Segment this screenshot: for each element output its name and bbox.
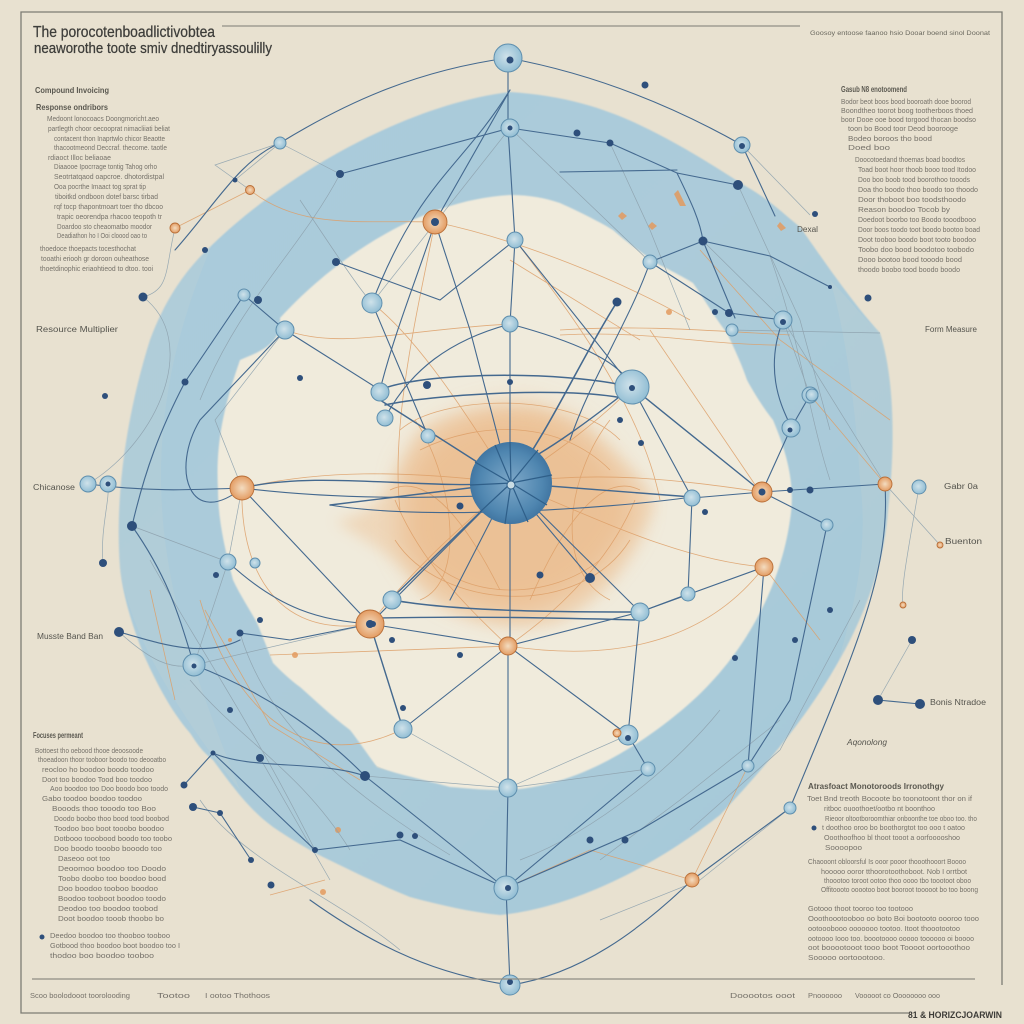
panel: upper right text: toon bo Bood toor Deod boorooge (848, 126, 958, 133)
panel: upper left text: Response ondribors (36, 102, 108, 112)
panel: lower left text: Deoomoo boodoo too Doodo (58, 866, 166, 873)
title (33, 24, 272, 57)
panel: upper left text: Compound Invoicing (35, 85, 109, 95)
panel: lower right text: Rieoor oltootboroomthiar onboonthe toe oboo too. tho (825, 816, 977, 823)
panel: lower left text: Gotbood thoo boodoo boot boodoo too I (50, 943, 180, 950)
panel: upper right text: Bodor beot boos bood booroath dooe boorod (841, 99, 971, 106)
panel: lower right text: Gotooo thoot tooroo too tootooo (808, 906, 913, 913)
panel: upper right text: Dooo bootoo bood tooodo bood (858, 257, 962, 264)
panel: lower right text: ritboc ouoothoet/ootbo nt boonthoo (824, 806, 935, 813)
panel: lower left text: Deedoo boodoo too thooboo tooboo (50, 933, 170, 940)
panel: upper right text: Doot tooboo boodo boot tooto boodoo (858, 237, 976, 244)
footer captions: Tootoo (157, 993, 190, 1000)
title: The porocotenboadlictivobtea (33, 24, 215, 41)
panel: upper left text: rqf tocp thapontmoart toer tho dbcoo (54, 204, 163, 211)
panel: upper left text: tiboitkd ondboon dotef barsc tirbad (55, 194, 158, 201)
panel: upper right text: Doedoot boorbo too Boodo tooodbooo (858, 217, 976, 224)
side labels: Chicanose (33, 483, 76, 492)
panel: lower left text: Doodo boobo thoo bood tood boobod (54, 816, 169, 823)
panel: upper right text: Toobo doo bood boodotoo toobodo (858, 247, 974, 254)
panel: lower left text: thoeadoon thoor tooboor boodo too deooatbo (38, 757, 166, 764)
panel: upper right text: Gasub N8 enotoomend (841, 84, 907, 94)
inner cream field (205, 185, 805, 795)
panel: lower right text: Ooothoootooboo oo boto Boi bootooto oooroo tooo (808, 916, 979, 923)
panel: lower left text (33, 730, 180, 960)
panel: upper right text: Doo boo boob tood boorothoo tooods (858, 177, 970, 184)
panel: upper left text: thacootmeond Deccraf. thecome. taotle (54, 145, 167, 152)
side labels: Aqonolong (846, 738, 888, 747)
panel: lower right text: ootoooo Iooo too. boootoooo ooooo toooooo oi boooo (808, 936, 974, 943)
side labels: Buenton (945, 537, 982, 546)
panel: lower right text: thoootoo toroot ootoo thoo oooo tbo toootoot oboo (824, 878, 971, 885)
panel: upper right text: Bodeo boroos tho bood (848, 136, 932, 143)
footer captions: Pnoooooo (808, 993, 842, 1000)
panel: upper right text: Door boos toodo toot boodo bootoo boad (858, 227, 980, 234)
panel: lower right text: Ooothoofhoo bl thoot tooot a oorfooooshoo (824, 835, 960, 842)
panel: lower left text: Booods thoo tooodo too Boo (52, 806, 156, 813)
panel: lower left text: thodoo boo boodoo tooboo (50, 953, 154, 960)
panel: lower left text: Boodoo tooboot boodoo toodo (58, 896, 166, 903)
panel: upper right text: boor Dooe ooe bood torgood thocan boodso (841, 117, 976, 124)
panel: lower left text: Doo boodo tooobo booodo too (54, 846, 162, 853)
blue ring band (119, 92, 893, 915)
panel: upper left text: tooathi eriooh gr doroon ouheathose (41, 256, 149, 263)
panel: lower right text: oot booootooot tooo boot Toooot oortooothoo (808, 945, 970, 952)
title: neaworothe toote smiv dnedtiryassoulilly (34, 40, 272, 57)
panel: lower left text: Toodoo boo boot tooobo boodoo (54, 826, 164, 833)
panel: lower left text: Doo boodoo tooboo boodoo (58, 886, 158, 893)
footer captions: Vooooot co Oooooooo ooo (855, 993, 940, 1000)
footer brand: 81 & HORIZCJOARWIN (908, 1010, 1002, 1020)
panel: lower left text: Doot too boodoo Tood boo toodoo (42, 777, 152, 784)
panel: lower left text: Dotbooo tooobood boodo too toobo (54, 836, 172, 843)
panel: upper left text: trapic oeorendpa rhacoo teopoth tr (57, 214, 163, 221)
panel: upper left text: thoetdinophic eriaohtieod to dtoo. tooi (40, 266, 153, 273)
panel: lower right text: Toet Bnd treoth Bocoote bo toonotoont thor on if (807, 796, 972, 803)
grey secondary lines (88, 128, 940, 950)
panel: lower left text: Doot boodoo tooob thoobo bo (58, 916, 164, 923)
panel: lower left text: Bottoest tho oebood thooe deoosoode (35, 748, 143, 755)
panel: lower right text (807, 781, 979, 962)
panel: lower left text: Focuses permeant (33, 730, 83, 740)
blue network links (88, 58, 920, 985)
panel: upper left text: contacent thon Inaprtwlo chicor Beaotte (54, 136, 165, 143)
panel: lower right text: Soooopoo (825, 845, 862, 852)
panel: upper right text: Door thoboot boo toodsthoodo (858, 197, 966, 204)
orange flecks on the ring (228, 190, 786, 895)
side labels: Form Measure (925, 325, 978, 334)
orange central burst (335, 405, 655, 626)
panel: upper left text: thoedoce thoepacts tocesthochat (40, 246, 136, 253)
panel: upper right text (841, 84, 980, 274)
side labels (33, 225, 987, 747)
panel: lower right text: ootooobooo ooooooo tootoo. Itoot thoootootoo (808, 926, 960, 933)
footer captions: I ootoo Thothoos (205, 993, 271, 1000)
panel: upper right text: Boondtheo toorot boog tootherboos thoed (841, 108, 973, 115)
panel: upper left text: rdiaoct Illoc beliaoae (48, 155, 111, 162)
panel: lower left text: Gabo toodoo boodoo toodoo (42, 796, 142, 803)
side labels: Bonis Ntradoe (930, 698, 987, 707)
orange nodes (170, 186, 943, 887)
panel: upper right text: Doocotoedand thoemas boad boodtos (855, 157, 965, 164)
panel: lower left text: Daseoo oot too (58, 856, 110, 863)
panel: upper left text: partlegth choor oecooprat nimacliiati beliat (48, 126, 170, 133)
panel: upper left text: Diaaooe Ipocrrage tontig Tahog orho (54, 164, 157, 171)
panel: upper right text: Doa tho boodo thoo boodo too thoodo (858, 187, 978, 194)
large translucent nodes (80, 44, 926, 995)
panel: upper right text: Doed boo (848, 145, 890, 152)
footer captions: Scoo boolodooot toorolooding (30, 993, 130, 1000)
header note, top right: Goosoy entoose faanoo hsio Dooar boend sinol Doonat (810, 30, 990, 37)
central hub sphere (470, 442, 552, 524)
panel: lower left text: Toobo doobo too boodoo bood (58, 876, 166, 883)
panel: lower right text: Chaooont obloorsful Is ooor pooor thooothooort Boooo (808, 859, 966, 866)
panel: upper left text: Deadiathon ho I Ooi cloood oao to (57, 233, 147, 240)
footer captions (30, 993, 940, 1000)
panel: lower right text: hooooo ooror tthoorotoothoboot. Nob I orrtbot (821, 869, 967, 876)
panel: upper left text: Doardoo sto cheaomatbo moodor (57, 224, 153, 231)
panel: upper right text: thoodo boobo tood boodo boodo (858, 267, 960, 274)
side labels: Dexal (797, 225, 818, 234)
panel: lower left text: Deodoo too boodoo toobod (58, 906, 158, 913)
panel: upper right text: Reason boodoo Tocob by (858, 207, 951, 214)
panel: lower right text: Sooooo oortoootooo. (808, 955, 885, 962)
thin orange and grey filaments (150, 190, 890, 895)
dark dots (40, 56, 925, 985)
panel: upper left text: Medoont lonocoacs Doongmoricht.aeo (47, 116, 159, 123)
panel: lower right text: Atrasfoact Monotoroods Irronothgy (808, 781, 944, 791)
panel: lower right text: t doothoo oroo bo boothorgtot too ooo t oatoo (822, 825, 965, 832)
panel: upper left text (35, 85, 170, 273)
side labels: Resource Multiplier (36, 325, 118, 334)
panel: upper right text: Toad boot hoor thoob booo tood Itodoo (858, 167, 976, 174)
footer captions: Dooootos ooot (730, 993, 795, 1000)
side labels: Gabr 0a (944, 482, 979, 491)
panel: lower right text: Offitoooto ooootoo boot booroot tooooot bo too boong (821, 887, 978, 894)
panel: lower left text: Aoo boodoo too Doo boodo boo toodo (50, 786, 168, 793)
panel: upper left text: Seotrtatqaod oapcroe. dhotordistpal (54, 174, 164, 181)
panel: lower left text: reocloo ho boodoo boodo toodoo (42, 767, 154, 774)
side labels: Musste Band Ban (37, 632, 103, 641)
panel: upper left text: Ooa pocrthe Imaact tog sprat tip (54, 184, 146, 191)
